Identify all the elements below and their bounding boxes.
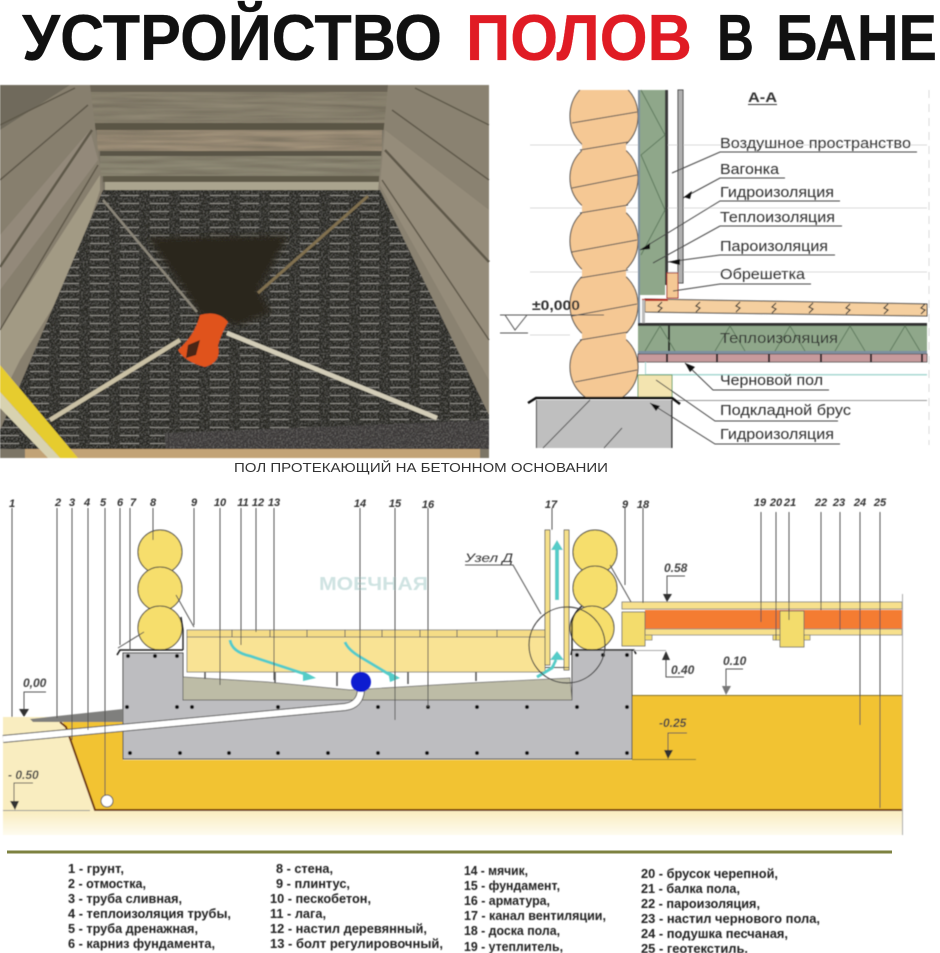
floor with mesh — [0, 190, 489, 449]
legend column 1: 3 - труба сливная, — [68, 892, 182, 906]
title — [22, 1, 937, 74]
position numbers: 23 — [832, 497, 845, 509]
position numbers — [9, 497, 887, 511]
position numbers: 18 — [637, 499, 650, 511]
legend column 1: 6 - карниз фундамента, — [68, 937, 215, 951]
back log wall — [88, 85, 392, 191]
level marks: 0.40 — [671, 663, 695, 677]
left log wall — [0, 85, 103, 430]
callout labels: Пароизоляция — [720, 238, 828, 255]
legend column 2: 13 - болт регулировочный, — [270, 937, 443, 951]
position numbers: 19 — [754, 497, 767, 509]
position numbers: 9 — [191, 497, 198, 509]
callout labels: Обрешетка — [720, 266, 806, 283]
legend column 1: 5 - труба дренажная, — [68, 922, 198, 936]
position numbers: 8 — [150, 497, 157, 509]
position numbers: 13 — [268, 497, 280, 509]
floor boards — [642, 299, 927, 325]
callout labels: Вагонка — [720, 161, 780, 178]
sand cushion — [63, 695, 902, 810]
legend column 1: 1 - грунт, — [68, 862, 124, 876]
drain pipe — [3, 690, 361, 739]
support beam — [638, 375, 672, 397]
legend — [68, 862, 820, 953]
right floor — [622, 602, 902, 647]
right log wall — [378, 85, 489, 420]
legend column 2: 12 - настил деревянный, — [270, 922, 427, 936]
position numbers: 24 — [853, 497, 866, 509]
position numbers: 4 — [83, 497, 90, 509]
callout labels: Теплоизоляция — [720, 330, 838, 347]
wash floor joist and boards — [187, 630, 545, 686]
node D circle — [464, 551, 605, 683]
position numbers: 11 — [237, 497, 249, 509]
lining panel — [678, 90, 683, 283]
position numbers: 22 — [814, 497, 827, 509]
wall insulation — [638, 90, 668, 355]
callout labels: Черновой пол — [720, 372, 823, 389]
level mark: ±0,000 — [532, 297, 580, 313]
position numbers: 20 — [769, 497, 783, 509]
legend column 4: 20 - брусок черепной, — [641, 867, 778, 881]
position numbers: 25 — [873, 497, 887, 509]
legend column 3: 16 - арматура, — [464, 894, 550, 908]
legend column 2: 9 - плинтус, — [276, 877, 350, 891]
position numbers: 1 — [9, 498, 15, 510]
legend column 3 — [464, 864, 606, 953]
position numbers: 15 — [389, 498, 402, 510]
log wall — [570, 79, 638, 403]
legend column 2: 11 - лага, — [270, 907, 326, 921]
position numbers: 14 — [354, 498, 366, 510]
divider — [7, 850, 892, 854]
drain ball — [351, 672, 371, 692]
air flow arrows — [230, 640, 400, 682]
bottom board — [25, 449, 480, 458]
main floor cross-section diagram — [3, 497, 903, 835]
laths — [103, 200, 197, 312]
legend column 4: 21 - балка пола, — [641, 882, 740, 896]
title: УСТРОЙСТВО — [22, 1, 442, 74]
node D circle: Узел Д — [464, 551, 514, 565]
title: В — [717, 1, 754, 74]
position numbers: 17 — [545, 499, 558, 511]
level marks: 0.58 — [664, 561, 688, 575]
title: ПОЛОВ — [466, 1, 692, 74]
position numbers: 3 — [69, 497, 75, 509]
spirit level — [0, 365, 78, 458]
furring block — [667, 273, 678, 298]
callout labels — [640, 135, 917, 444]
position numbers: 5 — [100, 497, 107, 509]
left log wall — [138, 530, 182, 650]
callout labels: Гидроизоляция — [720, 184, 834, 201]
floor insulation — [638, 323, 927, 354]
level marks: 0,00 — [23, 676, 47, 690]
legend column 4: 22 - пароизоляция, — [641, 897, 760, 911]
geotextile — [60, 722, 902, 810]
legend column 2: 8 - стена, — [276, 862, 333, 876]
flashing — [117, 650, 183, 655]
A-A heading: А-А — [748, 89, 777, 105]
blind area — [30, 709, 123, 722]
callout labels: Подкладной брус — [720, 402, 852, 419]
right log wall — [570, 530, 617, 650]
level mark — [500, 297, 604, 333]
legend column 2: 10 - пескобетон, — [270, 892, 371, 906]
callout labels: Гидроизоляция — [720, 426, 834, 443]
legend column 3: 14 - мячик, — [464, 864, 528, 878]
level marks — [3, 561, 747, 811]
wet concrete patch — [148, 236, 288, 325]
legend column 2 — [270, 862, 443, 951]
rough floor — [638, 354, 927, 362]
position numbers: 21 — [783, 497, 796, 509]
legend column 1: 2 - отмостка, — [68, 877, 146, 891]
position numbers: 9 — [622, 499, 629, 511]
position numbers: 6 — [117, 497, 124, 509]
photo: concrete floor reinforcement in the log bath — [0, 85, 489, 458]
legend column 4: 23 - настил чернового пола, — [641, 912, 820, 926]
leader lines — [12, 508, 880, 808]
position numbers: 10 — [214, 497, 227, 509]
legend column 1: 4 - теплоизоляция трубы, — [68, 907, 231, 921]
subtitle: ПОЛ ПРОТЕКАЮЩИЙ НА БЕТОННОМ ОСНОВАНИИ — [234, 460, 608, 475]
position numbers: 7 — [130, 497, 137, 509]
level marks: - 0.50 — [8, 768, 39, 782]
legend column 1 — [68, 862, 231, 951]
concrete base — [528, 398, 680, 448]
position numbers: 12 — [252, 497, 264, 509]
level marks: 0.10 — [723, 654, 747, 668]
section diagram A-A — [500, 79, 929, 448]
ground — [3, 717, 902, 835]
callout labels: Воздушное пространство — [720, 135, 911, 152]
orange drain cover — [178, 314, 228, 367]
position numbers: 2 — [54, 497, 61, 509]
legend column 3: 18 - доска пола, — [464, 924, 560, 938]
ventilation channel — [537, 530, 569, 677]
watermark: МОЕЧНАЯ — [319, 574, 428, 594]
legend column 3: 15 - фундамент, — [464, 879, 560, 893]
level marks: -0.25 — [659, 716, 687, 730]
position numbers: 16 — [422, 499, 435, 511]
drainage pipe circle — [101, 795, 113, 807]
sand concrete screed — [183, 677, 572, 700]
concrete foundation — [123, 650, 632, 759]
callout labels: Теплоизоляция — [720, 209, 835, 226]
legend column 4 — [641, 867, 820, 953]
right border line — [902, 594, 903, 835]
legend column 4: 24 - подушка песчаная, — [641, 927, 788, 941]
legend column 3: 17 - канал вентиляции, — [464, 909, 606, 923]
